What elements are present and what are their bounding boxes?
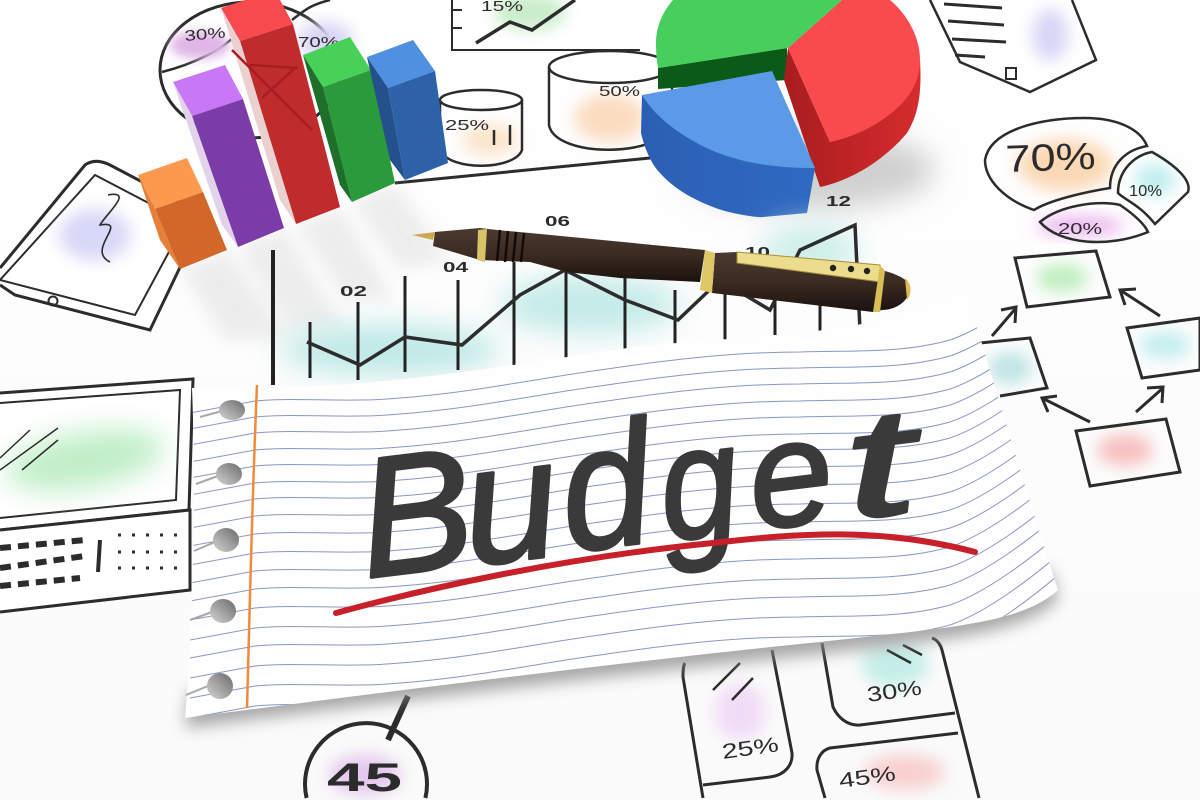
3D pie chart bbox=[641, 0, 935, 217]
sketch: 70% pie badge: 20% bbox=[1058, 221, 1102, 238]
bar: green bbox=[303, 37, 395, 202]
bar: purple bbox=[173, 65, 284, 247]
sketch: 70% pie badge: 10% bbox=[1129, 183, 1162, 200]
pie slice: blue bbox=[641, 71, 815, 217]
node: cyan left bbox=[980, 338, 1047, 396]
sketch: cylinder 25%: 25% bbox=[445, 117, 489, 134]
sketch: document top right bbox=[930, 0, 1096, 92]
pie slice: green bbox=[656, 0, 842, 89]
sketch: 70% pie badge bbox=[985, 118, 1189, 242]
bar: red bbox=[221, 0, 340, 224]
node: green bbox=[1015, 251, 1110, 307]
bar shadows bbox=[180, 183, 450, 340]
notebook paper bbox=[177, 324, 1066, 736]
sketch: cylinder 25% bbox=[440, 90, 522, 166]
box: 25% bbox=[683, 650, 792, 798]
sketch: flow diagram bbox=[980, 251, 1200, 486]
sketch: pie circle with percentages: 70% bbox=[298, 34, 339, 51]
handwritten title: d bbox=[549, 384, 666, 589]
sketch: line chart with bars: 12 bbox=[826, 193, 851, 210]
arrows bbox=[992, 289, 1163, 422]
sketch: laptop bbox=[0, 379, 193, 612]
handwritten title: g bbox=[648, 389, 748, 576]
sketch: cylinder 50% bbox=[549, 51, 672, 150]
sketch: 70% pie badge: 70% bbox=[1005, 136, 1096, 181]
node: cyan right bbox=[1127, 318, 1200, 378]
handwritten title: e bbox=[738, 385, 842, 562]
sketch: line chart with bars: 06 bbox=[545, 213, 570, 230]
sketch: line chart with bars bbox=[273, 193, 860, 385]
binder holes bbox=[186, 400, 245, 699]
sketch: pie circle with percentages: 30% bbox=[184, 24, 226, 45]
bar chart: 3D colored bars bbox=[138, 0, 450, 340]
bar: orange bbox=[138, 158, 227, 269]
box: 25%: 25% bbox=[720, 733, 780, 764]
sketch: 45 circle bbox=[305, 696, 427, 800]
red underline bbox=[336, 534, 975, 613]
ruled lines bbox=[190, 327, 1054, 718]
handwritten title: t bbox=[834, 375, 934, 551]
sketch: line chart with bars: 10 bbox=[745, 244, 770, 261]
pie slice: red bbox=[784, 0, 920, 187]
sketch: axis line under bars bbox=[395, 140, 900, 183]
box: 45% bbox=[817, 733, 958, 798]
pen bbox=[412, 228, 911, 312]
box: 30% bbox=[822, 638, 979, 798]
bar: blue bbox=[367, 40, 448, 180]
handwritten title: u bbox=[451, 403, 568, 603]
handwritten title: B bbox=[347, 412, 483, 615]
sketch: cylinder 50%: 50% bbox=[599, 83, 640, 100]
sketch: line chart with bars: 02 bbox=[340, 283, 367, 300]
sketch: percentage boxes bbox=[683, 638, 979, 798]
box: 30%: 30% bbox=[865, 677, 923, 707]
sketch: 45 circle: 45 bbox=[327, 756, 402, 800]
sketch: line chart with bars: 04 bbox=[443, 259, 469, 276]
node: red bbox=[1076, 419, 1180, 486]
box: 45%: 45% bbox=[837, 762, 897, 793]
sketch: small line chart top bbox=[452, 0, 640, 50]
sketch: pie circle with percentages bbox=[160, 0, 353, 138]
margin line bbox=[247, 385, 257, 708]
sketch: tablet bbox=[0, 161, 205, 330]
handwritten title bbox=[347, 375, 934, 615]
